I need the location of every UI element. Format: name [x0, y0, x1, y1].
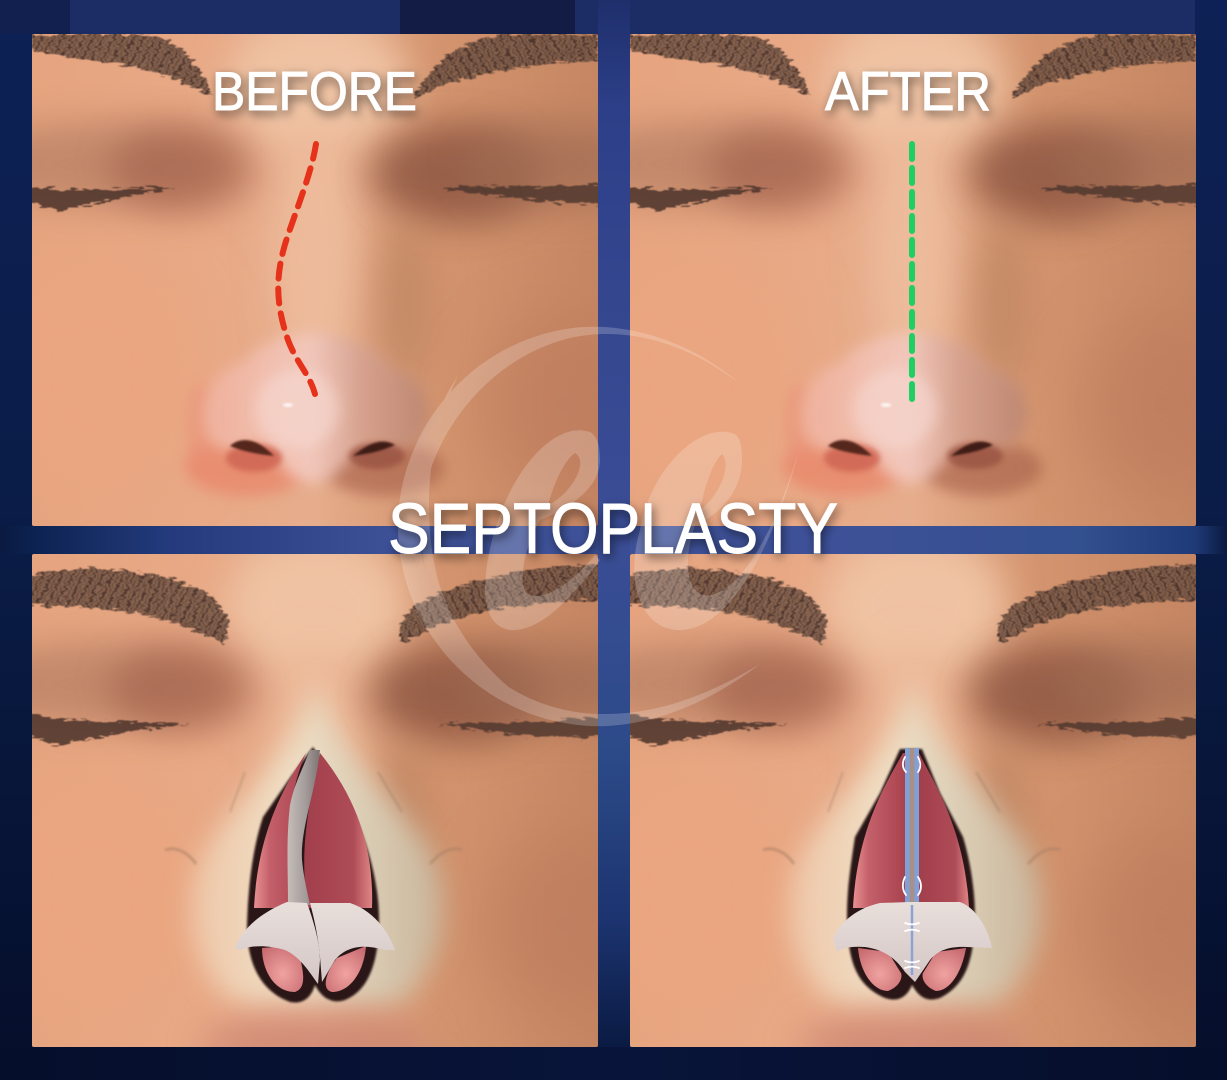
white sutures	[903, 757, 921, 968]
alar cartilage	[833, 902, 992, 982]
watermark script letter right	[634, 432, 800, 630]
left lower cavity	[858, 948, 901, 991]
panel: corrected septum anatomy	[630, 554, 1196, 1047]
right lower cavity	[923, 948, 966, 991]
watermark swoosh	[420, 376, 560, 722]
midline stitch and suture line	[911, 905, 913, 975]
right membrane	[919, 753, 969, 908]
nasal opening	[847, 749, 975, 1000]
after heading: AFTER	[825, 60, 991, 122]
before heading: BEFORE	[212, 60, 417, 122]
deviated septum	[288, 750, 320, 905]
straightened septum with splints	[905, 748, 919, 904]
left membrane	[254, 753, 306, 908]
right membrane	[304, 753, 372, 908]
left lower cavity	[262, 946, 303, 992]
alar cartilage	[235, 902, 395, 984]
watermark logo	[398, 327, 800, 726]
watermark ring	[398, 327, 760, 726]
before deviated nose line	[278, 144, 316, 394]
panel: before	[32, 34, 598, 526]
right lower cavity	[326, 946, 366, 992]
after straight nose line	[909, 144, 915, 406]
nasal opening	[247, 747, 379, 1003]
panel: deviated septum anatomy	[32, 554, 598, 1047]
watermark script letter left	[485, 430, 600, 630]
title: SEPTOPLASTY	[388, 490, 838, 569]
panel: after	[630, 34, 1196, 526]
left membrane	[853, 753, 905, 908]
